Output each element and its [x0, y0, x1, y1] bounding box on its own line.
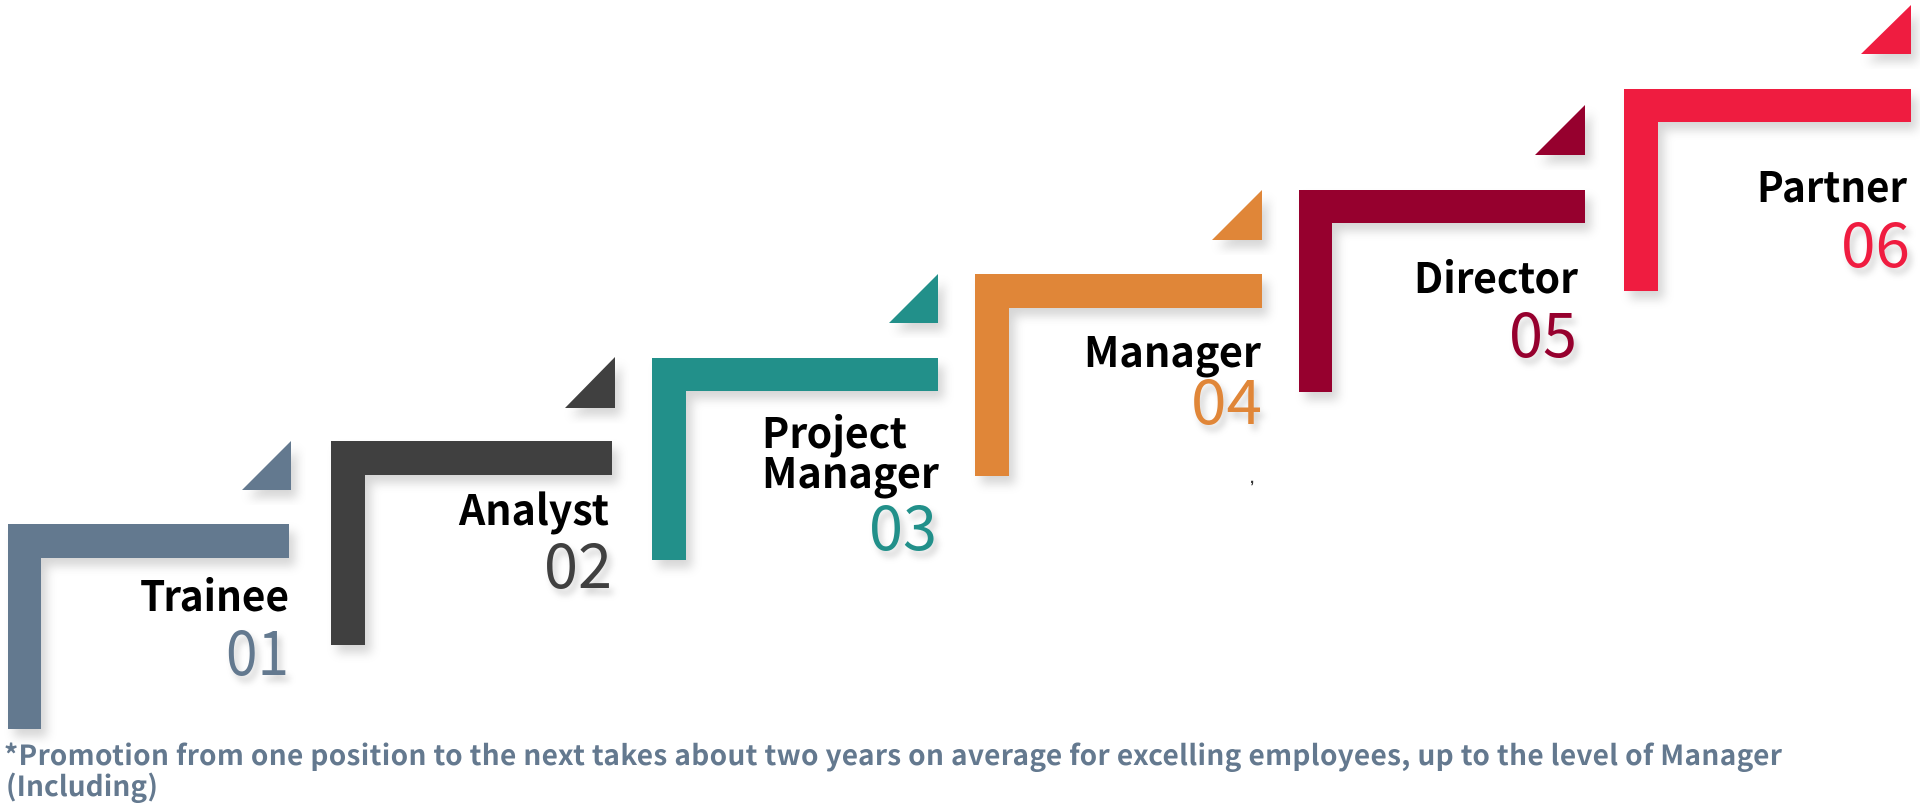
- label: Manager: Manager: [1084, 319, 1262, 380]
- footnote: (Including): [6, 765, 158, 805]
- number 03: 03: [869, 478, 937, 568]
- bracket 04: [975, 274, 1262, 476]
- number 04: 04: [1191, 352, 1262, 442]
- number 05: 05: [1509, 285, 1577, 375]
- footnote: [4, 734, 1783, 805]
- step 06: Partner: [1624, 5, 1911, 291]
- label: Trainee: Trainee: [140, 563, 289, 624]
- footnote: *Promotion from one position to the next takes about two years on average for excelling employees, up to the level of Manager: [4, 734, 1783, 774]
- step 05: Director: [1299, 105, 1585, 392]
- icon: triangle 05: [1535, 105, 1585, 155]
- bracket 03: [652, 358, 938, 560]
- label: Analyst: Analyst: [458, 477, 609, 538]
- icon: triangle 04: [1212, 190, 1262, 240]
- icon: triangle 01: [242, 441, 291, 490]
- label: Partner: Partner: [1757, 154, 1908, 215]
- label: Director: Director: [1414, 245, 1579, 306]
- number 01: 01: [226, 603, 289, 693]
- label: Project Manager: Manager: [762, 440, 940, 501]
- label: Project Manager: [762, 400, 940, 501]
- label: Project Manager: Project: [762, 400, 907, 461]
- bracket 02: [331, 441, 612, 645]
- bracket 06: [1624, 89, 1911, 291]
- icon: triangle 03: [889, 274, 938, 323]
- bracket 01: [8, 524, 289, 729]
- step 02: Analyst: [331, 357, 615, 645]
- step 04: Manager: [975, 190, 1262, 487]
- bracket 05: [1299, 190, 1585, 392]
- number 02: 02: [544, 516, 612, 606]
- icon: triangle 06: [1861, 5, 1911, 54]
- step 03: Project Manager: [652, 274, 940, 568]
- number 06: 06: [1841, 195, 1910, 285]
- stray comma: ,: [1250, 470, 1254, 487]
- icon: triangle 02: [565, 357, 615, 408]
- step 01: Trainee: [8, 441, 291, 729]
